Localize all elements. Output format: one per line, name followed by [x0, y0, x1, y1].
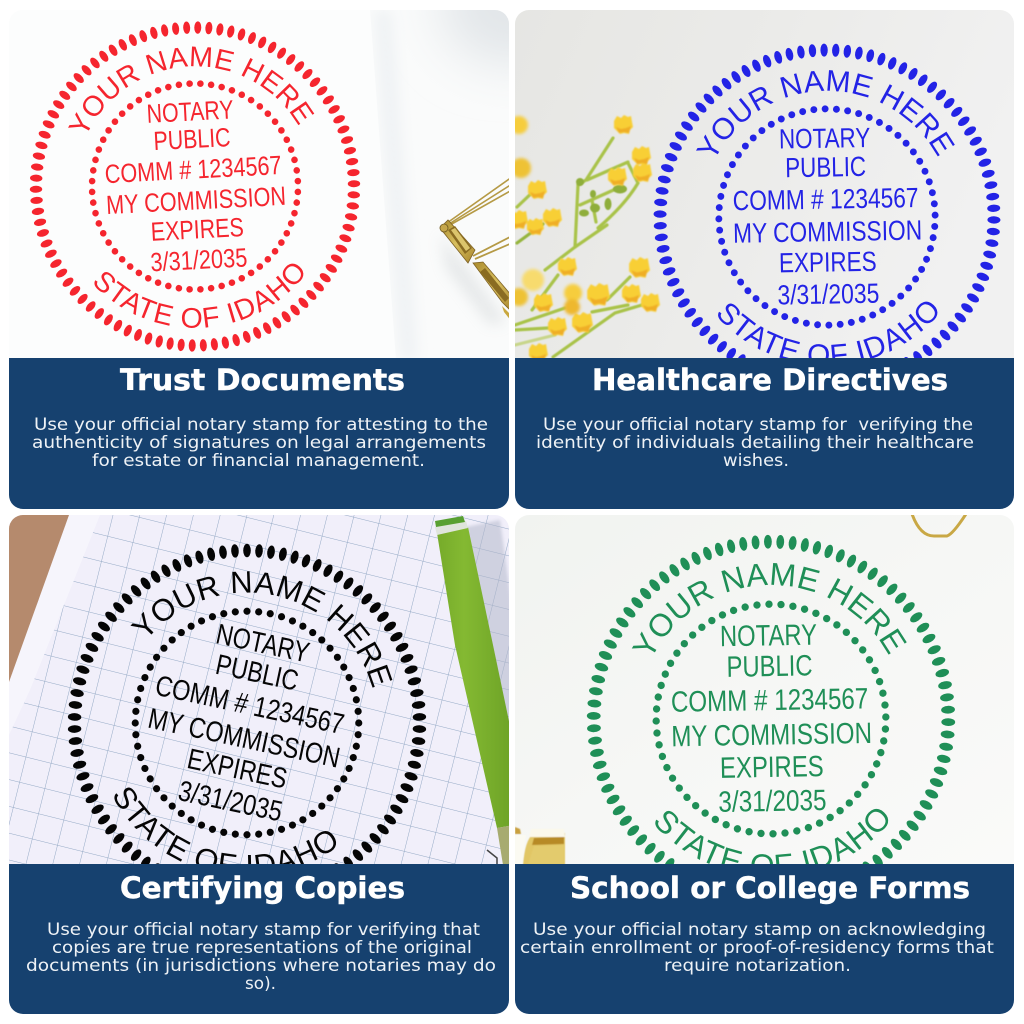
stamp center text: COMM # 1234567 — [732, 182, 919, 216]
stamp center text: COMM # 1234567 — [152, 670, 347, 741]
stamp center text — [731, 121, 923, 311]
caption box — [9, 358, 509, 509]
stamp center text: NOTARY — [779, 122, 871, 155]
stamp center text: COMM # 1234567 — [104, 150, 282, 189]
stamp center text: EXPIRES — [779, 246, 877, 278]
stamp center text: PUBLIC — [726, 649, 813, 684]
description: certain enrollment or proof-of-residency forms that — [520, 938, 994, 958]
illustration: yellow flowers — [509, 115, 660, 362]
photo background: paper on white desk — [371, 10, 509, 358]
stamp: green notary seal — [586, 534, 956, 864]
description: wishes. — [723, 451, 789, 471]
stamp center text — [106, 100, 285, 272]
icon: gold paperclip — [912, 514, 966, 536]
stamp center text: PUBLIC — [153, 122, 231, 156]
stamp: blue notary seal — [654, 44, 1000, 358]
heading: School or College Forms — [570, 871, 970, 905]
stamp center text: NOTARY — [720, 619, 817, 653]
flower heads — [509, 115, 660, 362]
description — [26, 920, 496, 994]
stamp center text: MY COMMISSION — [105, 181, 287, 220]
stamp arc text: state: STATE OF IDAHO — [718, 302, 938, 358]
photo background: grey surface — [515, 10, 1014, 360]
description — [32, 415, 488, 471]
description: for estate or financial management. — [92, 451, 425, 471]
panel: trust documents — [9, 10, 509, 509]
inner dotted ring — [132, 608, 362, 838]
outer dotted ring — [577, 524, 965, 914]
inner dotted ring — [88, 80, 302, 293]
stamp center text: MY COMMISSION — [145, 703, 343, 775]
panel: healthcare directives — [515, 10, 1014, 509]
description: Use your official notary stamp for verifying that — [47, 920, 480, 940]
inner dotted ring — [640, 588, 902, 850]
photo background: graph paper — [9, 515, 509, 865]
stamp center text: MY COMMISSION — [671, 717, 872, 753]
stamp arc text: name: YOUR NAME HERE — [130, 571, 392, 688]
stamp: red notary seal — [30, 21, 360, 352]
description — [520, 920, 994, 976]
outer dotted ring — [30, 21, 360, 352]
stamp: black notary seal — [68, 544, 426, 864]
stamp center text — [669, 618, 873, 820]
stamp center text: PUBLIC — [785, 151, 866, 183]
outer dotted ring — [68, 544, 426, 864]
stamp center text: COMM # 1234567 — [671, 682, 869, 719]
stamp center text: MY COMMISSION — [733, 214, 922, 249]
heading: Healthcare Directives — [592, 363, 948, 397]
stamp center text: 3/31/2035 — [718, 784, 827, 819]
description: Use your official notary stamp for attesting to the — [34, 415, 488, 435]
description: Use your official notary stamp for verifying the — [543, 415, 973, 435]
icon: gold binder clip — [440, 177, 512, 325]
heading: Certifying Copies — [120, 871, 405, 905]
stamp center text: EXPIRES — [720, 750, 824, 785]
stamp center text: 3/31/2035 — [150, 242, 248, 277]
panel: school or college forms — [515, 515, 1014, 1014]
caption box — [9, 864, 509, 1014]
stamp center text: NOTARY — [213, 618, 312, 669]
photo background: light surface — [515, 515, 1014, 865]
description: require notarization. — [664, 956, 851, 976]
description: authenticity of signatures on legal arrangements — [32, 433, 486, 453]
stamp arc text: name: YOUR NAME HERE — [696, 70, 955, 156]
description: Use your official notary stamp on acknowledging — [533, 920, 986, 940]
description: identity of individuals detailing their healthcare — [536, 433, 974, 453]
stamp arc text: name: YOUR NAME HERE — [632, 563, 907, 655]
outer dotted ring — [654, 44, 1000, 358]
caption box — [515, 358, 1014, 509]
stamp arc text: state: STATE OF IDAHO — [655, 808, 888, 864]
description: copies are true representations of the original — [52, 938, 472, 958]
stamp center text: 3/31/2035 — [175, 775, 285, 828]
stamp center text: NOTARY — [146, 94, 235, 129]
description — [538, 417, 973, 466]
icon: green pen — [435, 516, 509, 864]
stamp arc text: state: STATE OF IDAHO — [114, 788, 336, 864]
blurred flower heads — [510, 116, 582, 315]
description: documents (in jurisdictions where notaries may do — [26, 956, 496, 976]
stamp center text: 3/31/2035 — [777, 278, 880, 310]
panel: certifying copies — [9, 515, 509, 1014]
stamp center text: EXPIRES — [184, 743, 290, 796]
inner dotted ring — [715, 105, 939, 329]
stamp center text: PUBLIC — [213, 649, 301, 698]
caption box — [515, 864, 1014, 1014]
stamp arc text: state: STATE OF IDAHO — [94, 264, 304, 328]
description: so). — [245, 974, 276, 994]
heading: Trust Documents — [120, 363, 405, 397]
stamp arc text: name: YOUR NAME HERE — [68, 46, 314, 130]
stamp center text — [148, 624, 345, 820]
icon: gold clip — [515, 827, 565, 865]
stamp center text: EXPIRES — [150, 212, 244, 247]
